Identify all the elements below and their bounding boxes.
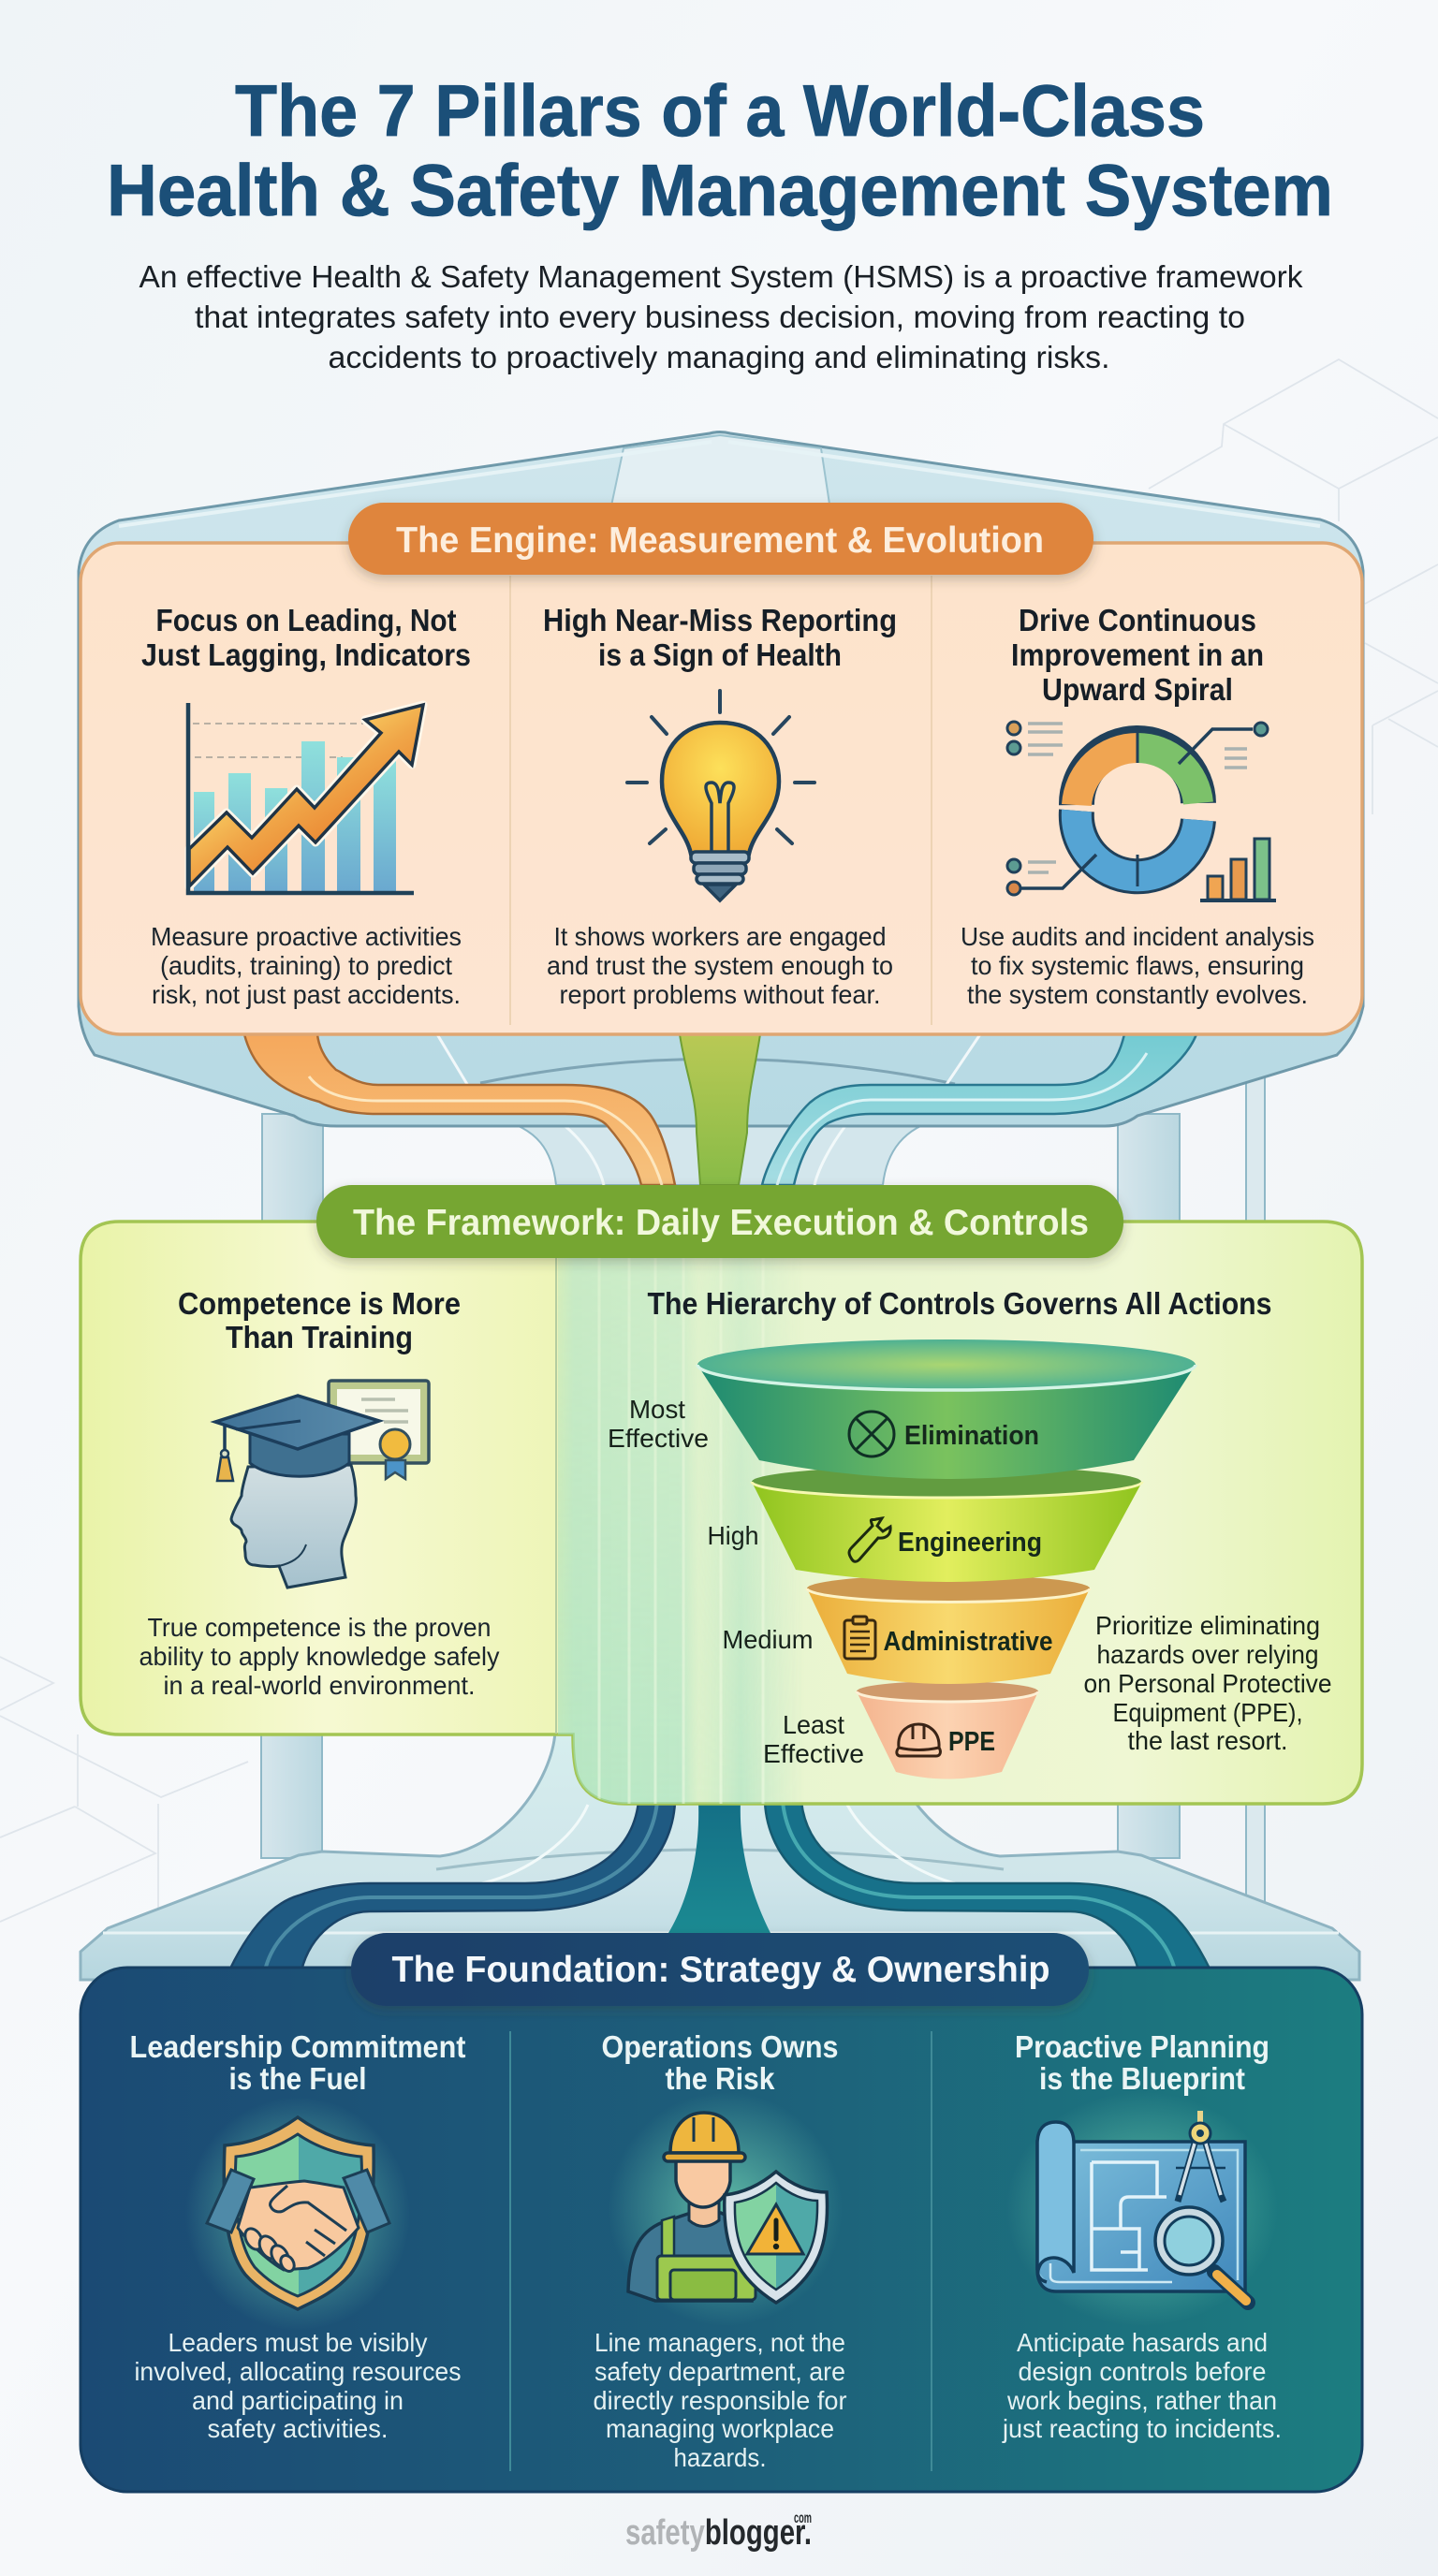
framework banner bbox=[316, 1185, 1123, 1258]
intro text bbox=[139, 259, 1303, 374]
foundation column 3: design controls before bbox=[1019, 2357, 1266, 2386]
title: Health & Safety Management System bbox=[107, 149, 1333, 231]
engine column 3: to fix systemic flaws, ensuring bbox=[971, 951, 1304, 980]
funnel side note: Equipment (PPE), bbox=[1112, 1698, 1303, 1727]
icon: light bulb bbox=[627, 691, 814, 900]
engine column 3: the system constantly evolves. bbox=[967, 980, 1308, 1009]
engine column 2 bbox=[543, 603, 897, 1009]
foundation column 2: Operations Owns bbox=[601, 2029, 839, 2064]
engine column 3: Improvement in an bbox=[1011, 637, 1264, 672]
foundation column 1: and participating in bbox=[192, 2386, 404, 2415]
lower columns bbox=[261, 1732, 1265, 1910]
icon: worker with warning shield bbox=[609, 2092, 843, 2326]
funnel effectiveness labels: Effective bbox=[763, 1739, 864, 1768]
foundation column 2: Line managers, not the bbox=[594, 2328, 845, 2357]
pipe: orange bbox=[244, 1034, 675, 1185]
pipe: teal bbox=[762, 1034, 1196, 1185]
foundation column 1: safety activities. bbox=[208, 2414, 388, 2443]
upper columns bbox=[262, 1076, 1265, 1222]
funnel effectiveness labels: Medium bbox=[723, 1625, 813, 1654]
engine column 1: (audits, training) to predict bbox=[160, 951, 452, 980]
icon: graduate head with certificate bbox=[215, 1381, 429, 1588]
icon: rising bar chart with arrow bbox=[188, 703, 423, 893]
panel: foundation bbox=[81, 1933, 1362, 2492]
funnel: engineering tier bbox=[752, 1466, 1142, 1582]
icon: cycle donut chart bbox=[1007, 722, 1276, 900]
engine column 1: risk, not just past accidents. bbox=[152, 980, 461, 1009]
logo: safetyblogger.com: com bbox=[794, 2510, 812, 2526]
funnel: administrative tier bbox=[807, 1574, 1090, 1684]
hierarchy of controls block: The Hierarchy of Controls Governs All Actions bbox=[648, 1286, 1271, 1321]
hierarchy of controls block bbox=[608, 1286, 1331, 1778]
foundation column 1: is the Fuel bbox=[228, 2061, 367, 2096]
engine column 3 bbox=[961, 603, 1314, 1009]
engine banner: The Engine: Measurement & Evolution bbox=[396, 520, 1044, 561]
funnel: elimination tier bbox=[697, 1339, 1196, 1479]
engine column 3: Upward Spiral bbox=[1042, 672, 1233, 707]
funnel: engineering tier: Engineering bbox=[898, 1528, 1042, 1558]
glass roof structure bbox=[79, 432, 1363, 1126]
foundation column 2: managing workplace bbox=[606, 2414, 834, 2443]
pipe: navy bbox=[229, 1802, 675, 1970]
competence block: ability to apply knowledge safely bbox=[139, 1642, 500, 1671]
engine column 2: High Near-Miss Reporting bbox=[543, 603, 897, 637]
competence block: Than Training bbox=[226, 1320, 413, 1354]
funnel side note bbox=[1084, 1611, 1331, 1755]
icon: shield with handshake bbox=[185, 2097, 410, 2331]
foundation column 3: just reacting to incidents. bbox=[1002, 2414, 1282, 2443]
engine column 2: is a Sign of Health bbox=[598, 637, 842, 672]
engine column 3: Use audits and incident analysis bbox=[961, 922, 1314, 951]
foundation column 3: work begins, rather than bbox=[1006, 2386, 1277, 2415]
panel: engine bbox=[81, 503, 1362, 1034]
funnel side note: on Personal Protective bbox=[1084, 1669, 1331, 1698]
foundation column 3: is the Blueprint bbox=[1039, 2061, 1245, 2096]
engine column 3: Drive Continuous bbox=[1019, 603, 1256, 637]
engine column 2: and trust the system enough to bbox=[547, 951, 893, 980]
competence block: in a real-world environment. bbox=[163, 1671, 476, 1700]
pipe: green bbox=[680, 1034, 760, 1185]
funnel: PPE tier: PPE bbox=[948, 1727, 995, 1757]
engine column 2: report problems without fear. bbox=[560, 980, 880, 1009]
funnel effectiveness labels bbox=[608, 1395, 864, 1768]
title: The 7 Pillars of a World-Class bbox=[235, 69, 1205, 152]
icon: blueprint with compass and magnifier bbox=[1006, 2092, 1278, 2326]
funnel: PPE tier bbox=[857, 1681, 1038, 1778]
foundation column 2 bbox=[594, 2029, 846, 2472]
foundation column 1: Leadership Commitment bbox=[129, 2029, 466, 2064]
framework banner: The Framework: Daily Execution & Controls bbox=[353, 1203, 1089, 1243]
foundation column 3: Anticipate hasards and bbox=[1017, 2328, 1268, 2357]
panel: framework bbox=[81, 1185, 1362, 1805]
engine column 1: Just Lagging, Indicators bbox=[141, 637, 471, 672]
funnel: elimination tier: Elimination bbox=[904, 1421, 1039, 1451]
competence block: True competence is the proven bbox=[148, 1613, 491, 1642]
center glass column bbox=[496, 1119, 941, 1185]
foundation banner: The Foundation: Strategy & Ownership bbox=[391, 1950, 1050, 1990]
logo: safetyblogger.com: safetyblogger. bbox=[625, 2513, 812, 2553]
glass base structure bbox=[81, 1732, 1359, 1980]
foundation column 2: safety department, are bbox=[594, 2357, 845, 2386]
foundation column 2: hazards. bbox=[674, 2443, 766, 2472]
foundation column 2: directly responsible for bbox=[594, 2386, 846, 2415]
funnel effectiveness labels: Effective bbox=[608, 1424, 709, 1453]
funnel side note: the last resort. bbox=[1127, 1726, 1288, 1755]
competence block bbox=[139, 1286, 500, 1700]
funnel effectiveness labels: Least bbox=[783, 1710, 844, 1739]
foundation column 1: involved, allocating resources bbox=[135, 2357, 461, 2386]
pipe: teal trunk bbox=[668, 1802, 770, 1933]
engine column 2: It shows workers are engaged bbox=[554, 922, 886, 951]
funnel side note: hazards over relying bbox=[1097, 1640, 1318, 1669]
intro text: that integrates safety into every business decision, moving from reacting to bbox=[195, 300, 1245, 334]
foundation banner bbox=[351, 1933, 1089, 2006]
engine banner bbox=[348, 503, 1093, 575]
title bbox=[107, 69, 1333, 231]
engine column 1: Measure proactive activities bbox=[151, 922, 462, 951]
funnel effectiveness labels: Most bbox=[629, 1395, 685, 1424]
funnel effectiveness labels: High bbox=[708, 1521, 758, 1550]
foundation column 1: Leaders must be visibly bbox=[169, 2328, 427, 2357]
foundation column 3 bbox=[1002, 2029, 1282, 2443]
funnel side note: Prioritize eliminating bbox=[1095, 1611, 1320, 1640]
intro text: An effective Health & Safety Management System (HSMS) is a proactive framework bbox=[139, 259, 1303, 294]
foundation column 3: Proactive Planning bbox=[1015, 2029, 1269, 2064]
foundation column 1 bbox=[129, 2029, 466, 2443]
engine column 1: Focus on Leading, Not bbox=[155, 603, 457, 637]
intro text: accidents to proactively managing and eliminating risks. bbox=[328, 340, 1110, 374]
competence block: Competence is More bbox=[178, 1286, 461, 1321]
foundation column 2: the Risk bbox=[665, 2061, 775, 2096]
pipe: deep teal bbox=[765, 1802, 1211, 1970]
funnel: administrative tier: Administrative bbox=[884, 1627, 1052, 1657]
engine column 1 bbox=[141, 603, 471, 1009]
